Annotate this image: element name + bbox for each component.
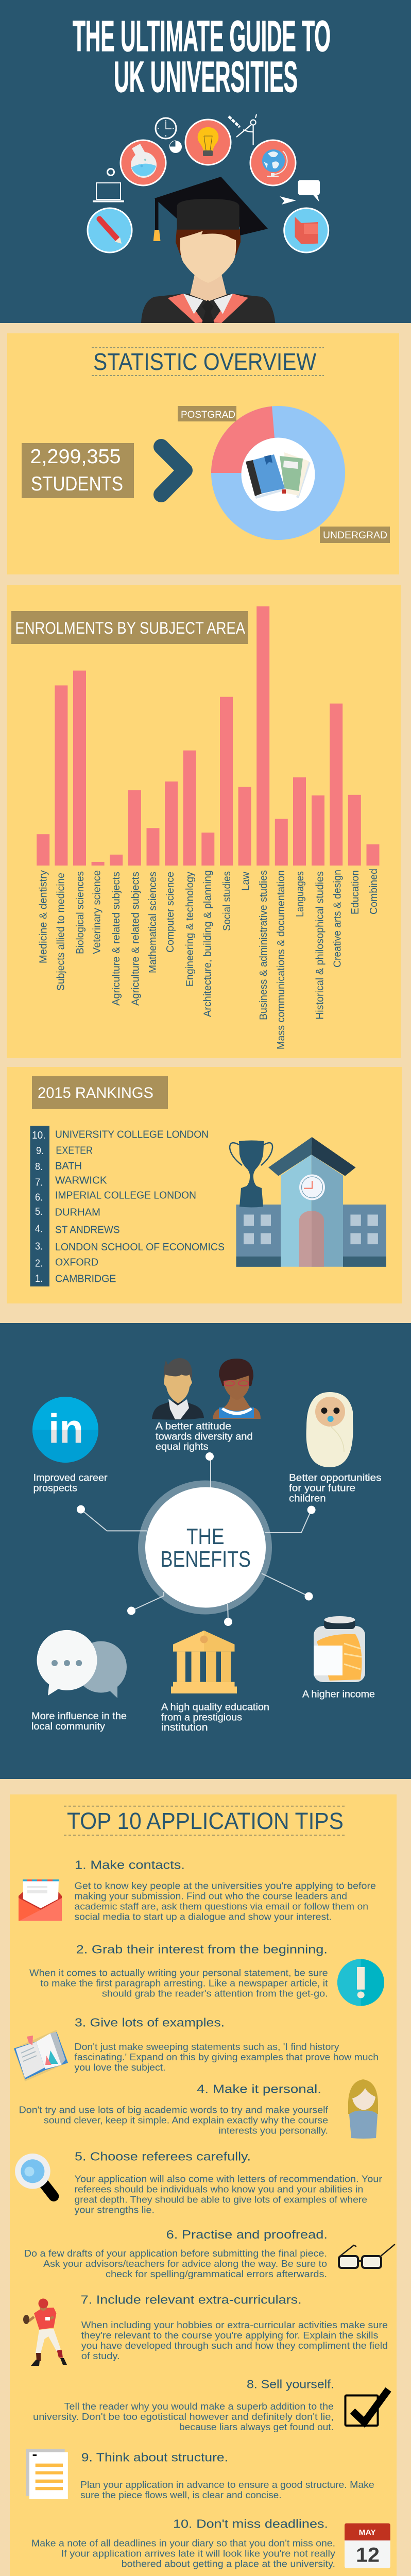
tip body bbox=[33, 2401, 334, 2432]
tip body: check for spelling/grammatical errors afterwards. bbox=[106, 2269, 327, 2279]
icon: linkedin: in bbox=[48, 1405, 83, 1452]
icon: book badge bbox=[284, 208, 329, 252]
tip body: your strengths lie. bbox=[74, 2205, 155, 2215]
axis labels: Social studies bbox=[221, 871, 233, 931]
heading: 2015 rankings: 2015 RANKINGS bbox=[38, 1084, 153, 1101]
tip body: university. Don't be too egotistical however and definitely don't lie, bbox=[33, 2412, 334, 2422]
tip heading: 7. Include relevant extra-curriculars. bbox=[81, 2293, 302, 2307]
tie bbox=[202, 300, 214, 323]
tip body: When including your hobbies or extra-curricular activities make sure bbox=[81, 2320, 388, 2330]
tip heading: 9. Think about structure. bbox=[81, 2451, 228, 2464]
tip 10 bbox=[31, 2517, 390, 2569]
rank numbers: 8. bbox=[35, 1161, 43, 1173]
panel: enrolments by subject area bbox=[7, 585, 401, 1058]
heading: the benefits: THE bbox=[186, 1524, 225, 1549]
icon: globe badge bbox=[250, 140, 296, 185]
axis labels: Veterinary science bbox=[91, 870, 102, 954]
icon: magnifying glass bbox=[15, 2154, 54, 2196]
icon: speech bubble bbox=[298, 180, 320, 202]
callout: total students: STUDENTS bbox=[31, 473, 123, 495]
tip body: Your application will also come with letters of recommendation. Your bbox=[74, 2174, 382, 2184]
woman bbox=[213, 1359, 261, 1419]
tip 7 bbox=[23, 2293, 388, 2366]
collar sash right bbox=[212, 294, 248, 323]
benefit: career prospects: prospects bbox=[33, 1483, 77, 1494]
axis labels: Creative arts & design bbox=[332, 870, 344, 968]
tip body: interests you personally. bbox=[218, 2126, 328, 2136]
rank numbers: 10. bbox=[32, 1130, 45, 1141]
icon: trophy bbox=[230, 1141, 272, 1208]
university names: OXFORD bbox=[55, 1257, 98, 1268]
axis labels: Education bbox=[350, 870, 361, 914]
tip body bbox=[81, 2320, 388, 2361]
rank numbers: 5. bbox=[35, 1206, 43, 1217]
tip body: of study. bbox=[81, 2351, 120, 2361]
gown bbox=[141, 294, 275, 323]
icon: institution building bbox=[171, 1631, 237, 1693]
icon: drawing compass bbox=[236, 114, 256, 145]
icon: speech bubbles bbox=[37, 1630, 127, 1698]
arrow: chevron bbox=[161, 447, 185, 495]
university names: BATH bbox=[55, 1161, 82, 1172]
rank number strip bbox=[30, 1126, 49, 1286]
axis labels: Business & administrative studies bbox=[258, 870, 269, 1020]
tip body: academic staff are, ask them questions via email or follow them on bbox=[74, 1902, 368, 1912]
benefit: quality education: from a prestigious bbox=[161, 1712, 242, 1723]
tip heading: 3. Give lots of examples. bbox=[75, 2015, 225, 2029]
face bbox=[180, 231, 236, 283]
callout: total students bbox=[22, 443, 134, 498]
axis labels: Engineering & technology bbox=[184, 872, 196, 987]
benefit: future children bbox=[289, 1472, 381, 1504]
donut chart: postgrad vs undergrad bbox=[211, 406, 345, 540]
tip body: fascinating.' Expand on this by giving examples that prove how much bbox=[74, 2052, 379, 2062]
neck bbox=[190, 272, 227, 301]
icon: laptop bbox=[93, 183, 124, 202]
heading: the benefits bbox=[161, 1524, 251, 1572]
tassel string bbox=[155, 198, 159, 230]
icon: document bbox=[26, 2449, 68, 2499]
axis labels: Historical & philosophical studies bbox=[314, 871, 326, 1020]
ranking list bbox=[30, 1126, 225, 1286]
benefit: higher income: A higher income bbox=[302, 1689, 375, 1700]
icon: flask badge bbox=[121, 140, 166, 185]
tip body: Don't just make sweeping statements such as, 'I find history bbox=[74, 2042, 339, 2052]
icon: calendar bbox=[345, 2523, 390, 2568]
university names: IMPERIAL COLLEGE LONDON bbox=[55, 1190, 196, 1201]
donut hole bbox=[241, 438, 315, 511]
tip body: Plan your application in advance to ensure a good structure. Make bbox=[80, 2480, 374, 2490]
benefit: future children: for your future bbox=[289, 1483, 355, 1494]
axis labels: Law bbox=[240, 871, 251, 891]
icon: baby bbox=[306, 1392, 353, 1467]
icon: calendar: 12 bbox=[356, 2544, 380, 2566]
graduate figure bbox=[141, 177, 275, 323]
axis labels: Medicine & dentistry bbox=[38, 870, 49, 963]
tip body: sure the piece flows well, is clear and concise. bbox=[80, 2490, 282, 2500]
icon: checkbox bbox=[345, 2389, 388, 2426]
benefit: diversity: towards diversity and bbox=[156, 1431, 253, 1442]
university names bbox=[55, 1129, 225, 1285]
tip body: sound clever, keep it simple. And explain exactly why the course bbox=[44, 2115, 328, 2126]
axis labels: Subjects allied to medicine bbox=[56, 873, 67, 991]
tip 9 bbox=[26, 2449, 374, 2500]
tip 3 bbox=[13, 2015, 379, 2081]
heading: 2015 rankings bbox=[32, 1076, 168, 1109]
icon: exclamation mark bbox=[337, 1959, 384, 2006]
tip 8 bbox=[33, 2378, 388, 2432]
tip body bbox=[74, 2042, 379, 2073]
heading: statistic overview: STATISTIC OVERVIEW bbox=[93, 348, 317, 375]
axis labels: Mass communications & documentation bbox=[276, 870, 287, 1049]
tip body: bothered about getting a place at the university. bbox=[122, 2559, 335, 2569]
header background bbox=[0, 0, 411, 323]
university names: WARWICK bbox=[55, 1175, 107, 1186]
heading: top 10 application tips: TOP 10 APPLICATION TIPS bbox=[67, 1808, 344, 1834]
axis labels: Languages bbox=[295, 871, 306, 917]
benefit: quality education: institution bbox=[161, 1722, 208, 1733]
cream background: tips area bbox=[0, 1779, 411, 2576]
icon: chain link bbox=[229, 116, 240, 127]
tip body: Tell the reader why you would make a superb addition to the bbox=[64, 2401, 334, 2412]
tip 1 bbox=[19, 1858, 376, 1922]
rank numbers bbox=[32, 1130, 45, 1284]
benefit: future children: Better opportunities bbox=[289, 1472, 381, 1484]
benefit: local community: More influence in the bbox=[31, 1711, 127, 1722]
icon: books bbox=[246, 452, 311, 499]
tip body: you have developed through such and how they compliment the field bbox=[81, 2341, 388, 2351]
tip body bbox=[74, 2174, 382, 2215]
icon: gear bbox=[107, 169, 114, 175]
tip body bbox=[19, 2105, 329, 2136]
benefit: career prospects bbox=[33, 1472, 108, 1494]
tassel bbox=[153, 230, 161, 241]
tip body: Don't try and use lots of big academic words to try and make yourself bbox=[19, 2105, 329, 2115]
icon: football player bbox=[23, 2299, 67, 2366]
icon: linkedin bbox=[32, 1397, 98, 1463]
callout: total students: 2,299,355 bbox=[30, 446, 121, 468]
postgrad slice bbox=[211, 406, 275, 473]
navy background: benefits area bbox=[0, 1323, 411, 1779]
benefit: diversity: equal rights bbox=[156, 1442, 209, 1452]
axis labels: Computer science bbox=[165, 872, 176, 953]
heading: enrolments by subject area bbox=[11, 611, 248, 644]
rank numbers: 3. bbox=[35, 1241, 43, 1252]
icon: jar of coins bbox=[314, 1616, 365, 1682]
tip body bbox=[31, 2538, 335, 2569]
tip 4 bbox=[19, 2079, 378, 2139]
icon: envelope bbox=[19, 1879, 62, 1921]
connector dots bbox=[77, 1452, 316, 1626]
tip body: to make the first paragraph arresting. Like a newspaper article, it bbox=[40, 1978, 328, 1989]
panel: 2015 rankings bbox=[7, 1067, 402, 1303]
university names: DURHAM bbox=[55, 1207, 100, 1218]
tip body: When it comes to actually writing your personal statement, be sure bbox=[29, 1968, 328, 1978]
university names: CAMBRIDGE bbox=[55, 1274, 116, 1285]
panel: top 10 application tips bbox=[10, 1794, 397, 2576]
hair bbox=[176, 229, 241, 255]
tip body bbox=[24, 2248, 327, 2279]
cap base bbox=[177, 199, 239, 230]
axis labels: Agriculture & related subjects bbox=[111, 872, 122, 1006]
tip heading: 1. Make contacts. bbox=[75, 1858, 185, 1872]
tip body: referees should be individuals who know you and your abilities in bbox=[74, 2184, 363, 2195]
cap board bbox=[155, 177, 268, 235]
rank numbers: 6. bbox=[35, 1192, 43, 1204]
icon: clock bbox=[156, 118, 176, 139]
axis labels: Combined bbox=[368, 869, 380, 914]
benefit: local community: local community bbox=[31, 1721, 106, 1732]
rank numbers: 4. bbox=[35, 1223, 43, 1234]
tip body: Do a few drafts of your application before submitting the final piece. bbox=[24, 2248, 327, 2259]
rank numbers: 9. bbox=[36, 1145, 44, 1157]
rank numbers: 2. bbox=[35, 1258, 43, 1269]
benefits hub bbox=[77, 1452, 316, 1626]
label: undergrad bbox=[320, 527, 390, 543]
label: undergrad: UNDERGRAD bbox=[323, 530, 387, 541]
icon: two people bbox=[152, 1358, 261, 1420]
tip 6 bbox=[24, 2228, 395, 2279]
icon: pie chart bbox=[169, 141, 182, 153]
tip body: Ask your advisors/teachers for advice along the way. Be sure to bbox=[43, 2259, 327, 2269]
benefit: career prospects: Improved career bbox=[33, 1472, 108, 1484]
tip body: making your submission. Find out who the course leaders and bbox=[74, 1891, 347, 1902]
university names: UNIVERSITY COLLEGE LONDON bbox=[55, 1129, 209, 1140]
tip body: Make a note of all deadlines in your diary so that you don't miss one. bbox=[31, 2538, 335, 2549]
tip body: If your application arrives late it will look like you're not really bbox=[61, 2549, 335, 2559]
tip body: because liars always get found out. bbox=[179, 2422, 334, 2432]
tip heading: 6. Practise and proofread. bbox=[166, 2228, 328, 2241]
tip body: should grab the reader's attention from the get-go. bbox=[102, 1989, 328, 1999]
connector lines bbox=[81, 1456, 312, 1622]
university names: EXETER bbox=[56, 1145, 93, 1156]
benefit: local community bbox=[31, 1711, 127, 1732]
axis labels: Architecture, building & planning bbox=[202, 870, 214, 1017]
panel: the benefits bbox=[31, 1358, 381, 1733]
tip body: great depth. They should be able to give lots of examples of where bbox=[74, 2195, 367, 2205]
axis labels: Agriculture & related subjects bbox=[130, 872, 142, 1006]
tip heading: 10. Don't miss deadlines. bbox=[173, 2517, 328, 2531]
tip body: they're relevant to the course you're applying for. Explain the skills bbox=[81, 2330, 378, 2341]
icon: university building bbox=[236, 1137, 386, 1267]
panel: statistic overview bbox=[7, 333, 399, 574]
benefit: diversity bbox=[156, 1421, 253, 1452]
tip body: Get to know key people at the universities you're applying to before bbox=[74, 1881, 376, 1891]
icon: light bulb badge bbox=[185, 120, 231, 165]
benefit: future children: children bbox=[289, 1493, 326, 1504]
icon: calendar: MAY bbox=[359, 2528, 376, 2537]
benefit: quality education bbox=[161, 1702, 269, 1733]
cream background: statistics area bbox=[0, 323, 411, 1323]
title bbox=[73, 12, 331, 101]
tip heading: 2. Grab their interest from the beginning. bbox=[76, 1943, 328, 1956]
heading: the benefits: BENEFITS bbox=[161, 1547, 251, 1572]
rank numbers: 7. bbox=[35, 1177, 43, 1189]
tip body bbox=[29, 1968, 328, 1999]
bars bbox=[37, 606, 379, 866]
axis labels bbox=[38, 869, 380, 1049]
tip heading: 4. Make it personal. bbox=[197, 2082, 321, 2095]
man bbox=[152, 1358, 204, 1420]
bar chart: enrolments bbox=[37, 606, 380, 1049]
heading: enrolments by subject area: ENROLMENTS BY SUBJECT AREA bbox=[15, 619, 246, 637]
rank numbers: 1. bbox=[35, 1273, 43, 1284]
tip heading: 5. Choose referees carefully. bbox=[75, 2149, 251, 2163]
icon: pencil badge bbox=[88, 208, 132, 252]
undergrad slice bbox=[211, 406, 345, 540]
benefit: diversity: A better attitude bbox=[156, 1421, 231, 1432]
tip body: social media to start up a dialogue and show your interest. bbox=[74, 1912, 332, 1922]
tip heading: 8. Sell yourself. bbox=[247, 2378, 334, 2391]
tip body: you love the subject. bbox=[74, 2062, 166, 2073]
axis labels: Biological sciences bbox=[75, 871, 86, 954]
university names: ST ANDREWS bbox=[55, 1225, 120, 1236]
university names: LONDON SCHOOL OF ECONOMICS bbox=[55, 1242, 225, 1253]
white collar bbox=[183, 294, 233, 314]
icon: woman bbox=[348, 2079, 378, 2139]
tip body bbox=[74, 1881, 376, 1922]
label: postgrad bbox=[178, 406, 236, 421]
icon: open book bbox=[13, 2030, 68, 2081]
benefit: quality education: A high quality education bbox=[161, 1702, 269, 1713]
collar sash left bbox=[168, 294, 204, 323]
axis labels: Mathematical sciences bbox=[147, 872, 159, 973]
tip 2 bbox=[29, 1943, 384, 2006]
tip 5 bbox=[15, 2149, 382, 2215]
icon: glasses bbox=[339, 2245, 395, 2268]
tip body bbox=[80, 2480, 374, 2500]
label: postgrad: POSTGRAD bbox=[181, 409, 235, 420]
hero illustration: graduate and study icons bbox=[88, 114, 329, 323]
icon: paper plane bbox=[280, 196, 296, 205]
